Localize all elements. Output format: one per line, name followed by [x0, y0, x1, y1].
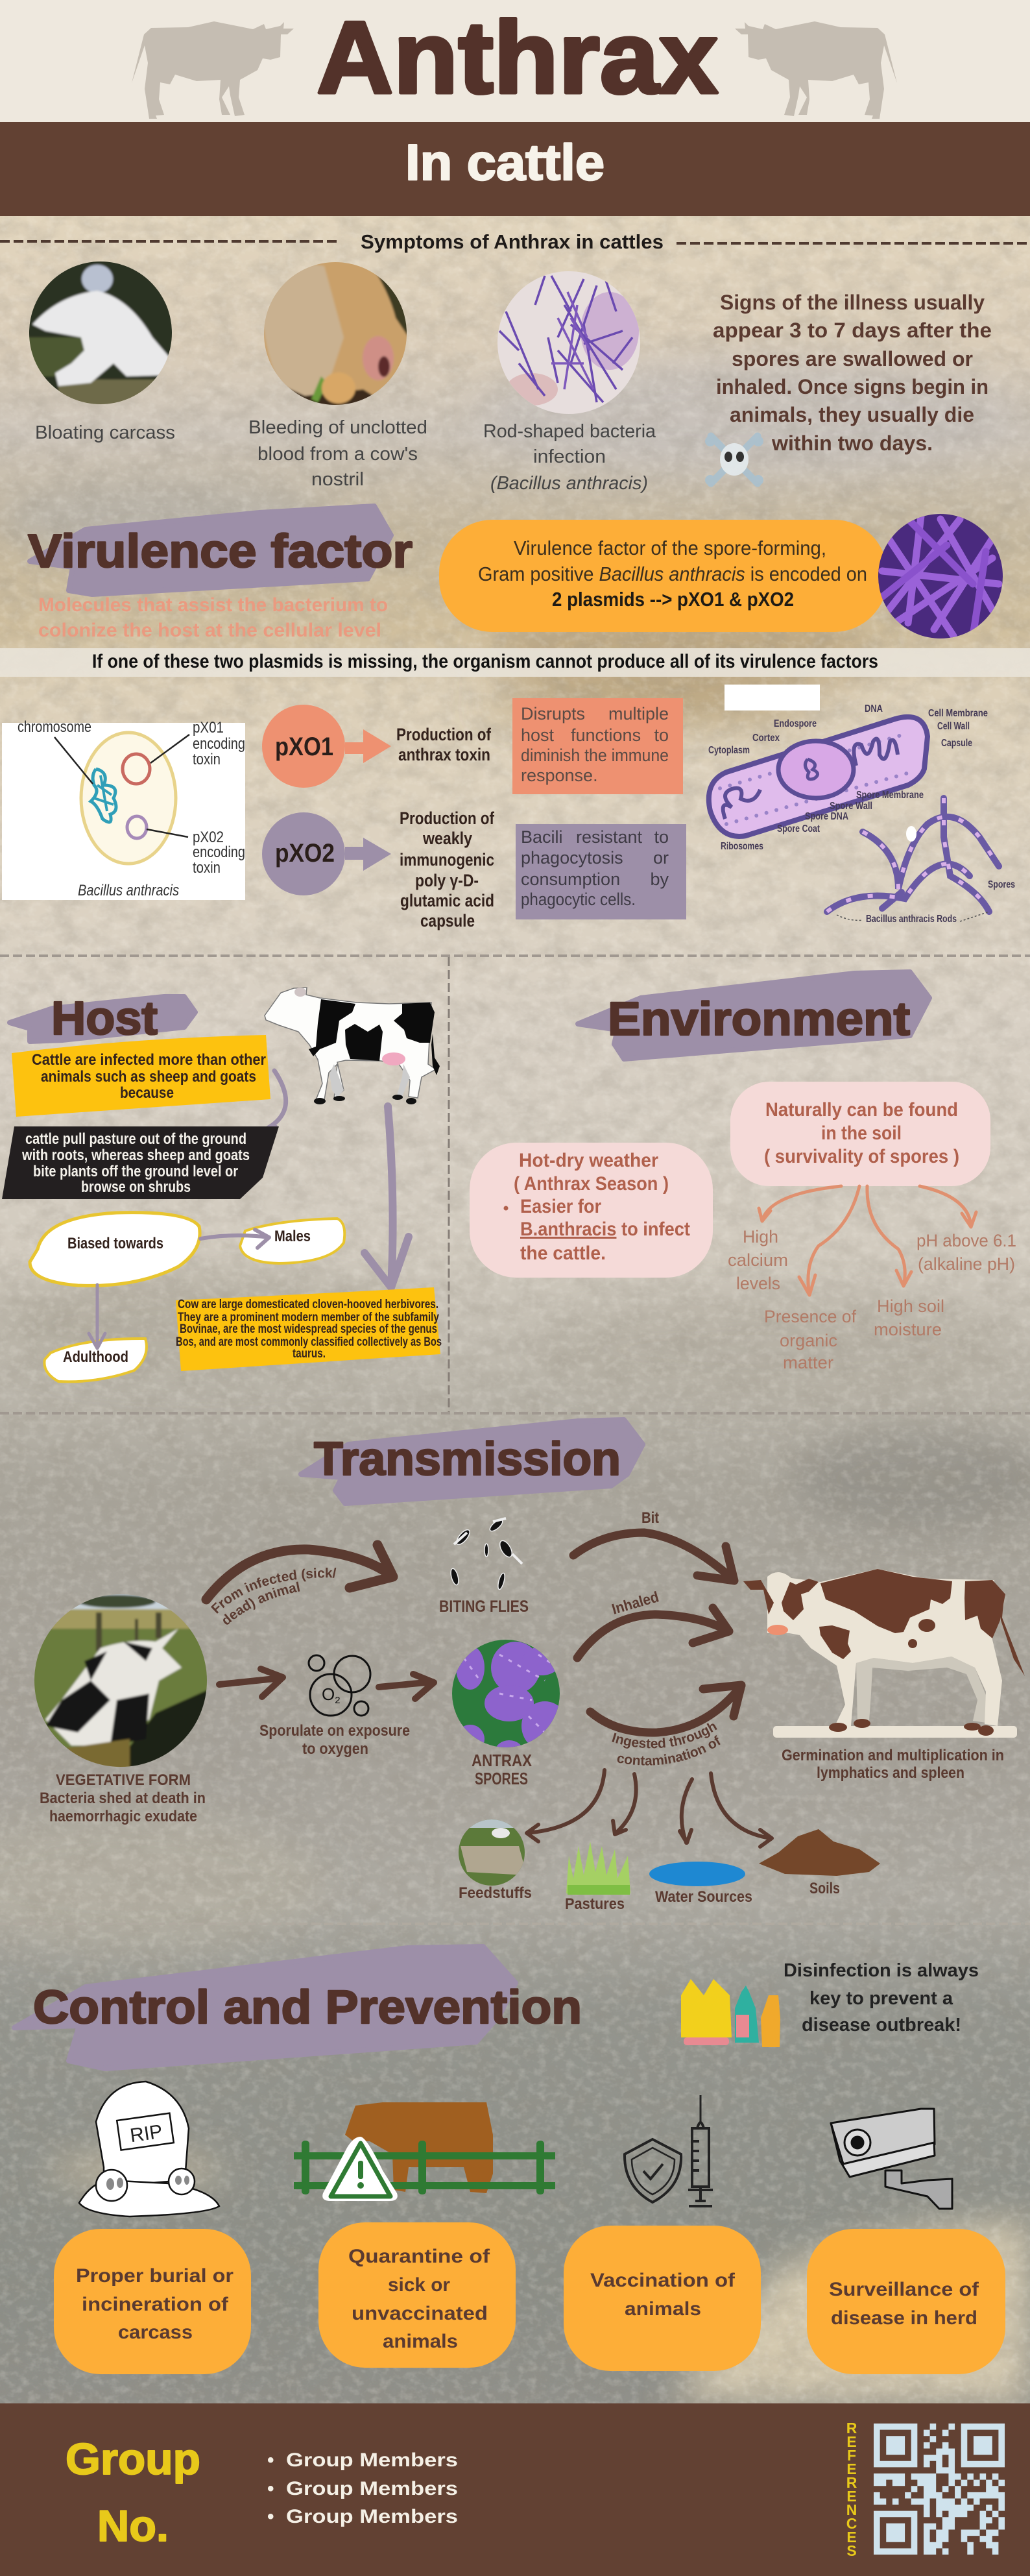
panel: soil: Naturally can be found	[765, 1099, 958, 1121]
references label: N	[846, 2501, 857, 2518]
group members list: •	[267, 2506, 274, 2527]
section: transmission	[32, 1420, 1025, 1913]
label: soils: Soils	[809, 1880, 840, 1897]
label: antrax spores: ANTRAX	[472, 1751, 533, 1770]
diagram: bacillus rods	[827, 798, 1015, 925]
diagram: bacterium anatomy: Spore Membrane	[856, 790, 924, 801]
pXO1 box: functions	[571, 725, 641, 745]
callout text	[32, 1051, 266, 1102]
caption: bacteria: (Bacillus anthracis)	[490, 473, 648, 494]
icon: tombstone	[79, 2082, 219, 2217]
pXO2 box: by	[650, 869, 669, 889]
pXO1 node	[262, 705, 345, 788]
curved label: from infected: dead) animal	[223, 1582, 300, 1625]
callout text	[478, 537, 867, 611]
pXO1 box: response.	[521, 766, 598, 785]
arrow: oxygen to spores	[379, 1674, 434, 1699]
diagram: Bacillus anthracis plasmids: toxin	[193, 859, 221, 877]
icon: cow silhouette right	[735, 21, 897, 119]
diagram: bacterium anatomy: Ribosomes	[721, 841, 763, 852]
arrow: cow to description	[365, 1106, 409, 1287]
references label: S	[846, 2542, 857, 2559]
label: organic matter: Presence of	[764, 1307, 856, 1326]
icon: water	[649, 1862, 745, 1886]
icon: quarantine cow and fence	[294, 2102, 555, 2201]
diagram: bacterium anatomy: Cytoplasm	[708, 745, 750, 756]
label: pH	[916, 1231, 1016, 1274]
label: water sources: Water Sources	[655, 1888, 752, 1906]
pXO2 production text: immunogenic	[400, 850, 494, 869]
icon: oxygen bubbles: O	[322, 1684, 335, 1704]
photo: feedstuffs	[457, 1819, 529, 1887]
section: symptoms	[0, 230, 1030, 494]
label: sporulate	[259, 1722, 410, 1758]
subtext: Molecules that assist the bacterium to	[38, 594, 388, 616]
diagram: bacterium anatomy: Capsule	[941, 738, 972, 749]
label: pastures: Pastures	[565, 1895, 625, 1913]
card: vaccination: animals	[625, 2298, 701, 2320]
pXO2 box: or	[653, 848, 669, 868]
callout text: because	[120, 1084, 174, 1102]
group members list: •	[267, 2449, 274, 2471]
panel: hot-dry weather: B.anthracis to infect	[520, 1219, 690, 1240]
callout text: Cattle are infected more than other	[32, 1051, 266, 1069]
group members list: •	[267, 2478, 274, 2499]
arrow: bit	[573, 1533, 734, 1581]
signs text block: within two days.	[771, 431, 933, 455]
description text: Bos, and are most commonly classified collectively as Bos	[176, 1335, 442, 1349]
pXO2 box	[516, 824, 686, 919]
white patch	[725, 685, 820, 711]
arrow: pXO1	[345, 729, 391, 763]
description text: Bovinae, are the most widespread species of the genus	[180, 1322, 437, 1336]
label: antrax spores	[472, 1751, 533, 1788]
pXO1 production text	[396, 725, 492, 764]
card: burial: carcass	[118, 2322, 193, 2343]
disinfection text: key to prevent a	[809, 1988, 953, 2009]
banner text: If one of these two plasmids is missing, the organism cannot produce all of its virulence factors	[92, 651, 878, 672]
arrow: to adulthood	[89, 1285, 105, 1348]
label: sporulate: Sporulate on exposure	[259, 1722, 410, 1740]
label: inhaled: Inhaled	[610, 1588, 661, 1618]
references label: C	[846, 2515, 857, 2532]
heading: Host	[51, 993, 158, 1045]
pXO1 production text: anthrax toxin	[398, 745, 490, 764]
icon: oxygen bubbles: 2	[335, 1695, 341, 1706]
arrow: bacteria to oxygen	[219, 1669, 283, 1697]
brush stroke	[30, 506, 391, 594]
diagram: Bacillus anthracis plasmids: encoding	[193, 844, 245, 861]
yellow callout	[12, 1035, 270, 1117]
pXO2 production text: weakly	[422, 829, 472, 848]
arrow: ingested	[590, 1685, 741, 1732]
pXO1 box: to	[654, 725, 669, 745]
diagram: Bacillus anthracis plasmids: chromosome	[18, 718, 91, 736]
references label: E	[846, 2433, 857, 2450]
icon: oxygen bubbles	[309, 1655, 370, 1716]
callout text: Virulence factor of the spore-forming,	[514, 537, 826, 559]
icon: tombstone: RIP	[128, 2121, 164, 2146]
blob: biased towards	[30, 1213, 200, 1285]
QR code	[874, 2424, 1005, 2555]
symptoms heading: Symptoms of Anthrax in cattles	[361, 230, 664, 253]
photo: bleeding nostril	[264, 262, 407, 405]
diagram: Bacillus anthracis plasmids	[2, 718, 245, 900]
caption: bacteria	[483, 421, 656, 494]
diagram: Bacillus anthracis plasmids: toxin	[193, 751, 221, 768]
label: vegetative form	[40, 1771, 206, 1825]
black callout text: with roots, whereas sheep and goats	[21, 1147, 250, 1164]
plasmid warning banner	[0, 648, 1030, 677]
signs text block: appear 3 to 7 days after the	[713, 319, 992, 342]
label: biting flies: BITING FLIES	[439, 1598, 529, 1616]
references label: E	[846, 2529, 857, 2546]
callout text: 2 plasmids --> pXO1 & pXO2	[552, 588, 794, 611]
disinfection text: Disinfection is always	[784, 1960, 979, 1981]
label: feedstuffs: Feedstuffs	[459, 1884, 532, 1902]
diagram: bacterium anatomy: Spore DNA	[805, 811, 848, 822]
curved label: ingested	[610, 1719, 724, 1769]
label: soil moisture	[874, 1296, 944, 1339]
references label	[846, 2420, 857, 2559]
references label: E	[846, 2461, 857, 2477]
diagram: bacterium anatomy: Cell Wall	[937, 721, 970, 732]
callout text: Gram positive Bacillus anthracis is encoded on	[478, 563, 867, 585]
pXO2 production text: poly γ-D-	[415, 871, 479, 890]
pXO2 box: to	[654, 827, 669, 847]
label: germination: Germination and multiplication in	[782, 1747, 1004, 1764]
panel: hot-dry weather: ( Anthrax Season )	[514, 1173, 669, 1195]
group number: Group	[66, 2435, 200, 2484]
diagram: Bacillus anthracis plasmids: encoding	[193, 735, 245, 753]
icon: brown and white cow	[743, 1569, 1025, 1738]
pXO1 box: host	[521, 725, 555, 745]
label: high calcium: calcium	[728, 1250, 788, 1270]
subtext	[38, 594, 388, 641]
label: antrax spores: SPORES	[475, 1769, 528, 1788]
yellow description box	[176, 1287, 440, 1371]
card: quarantine: sick or	[388, 2274, 450, 2296]
diagram: Bacillus anthracis plasmids: Bacillus anthracis	[78, 882, 179, 899]
group members list: Group Members	[286, 2449, 458, 2471]
label: pH: pH above 6.1	[916, 1231, 1016, 1250]
card: burial: Proper burial or	[76, 2265, 234, 2287]
pXO2 production text	[400, 808, 495, 930]
section: control and prevention	[14, 1947, 1005, 2374]
subtitle band	[0, 122, 1030, 216]
caption: bacteria: Rod-shaped bacteria	[483, 421, 656, 442]
label: high calcium	[728, 1227, 788, 1293]
card: quarantine: animals	[383, 2331, 458, 2352]
diagram: bacillus rods: Spores	[988, 879, 1015, 890]
caption: bleeding	[248, 417, 427, 490]
arrow: from infected animal	[206, 1545, 393, 1599]
diagram: Bacillus anthracis plasmids: pX02	[193, 829, 224, 846]
arrows: sources	[527, 1770, 772, 1847]
black callout	[2, 1126, 279, 1199]
pXO1 box: Disrupts	[521, 704, 585, 723]
icon: pastures	[566, 1841, 630, 1895]
signs text block: animals, they usually die	[730, 403, 974, 426]
label: vegetative form: Bacteria shed at death in	[40, 1790, 206, 1807]
card: quarantine: unvaccinated	[352, 2303, 488, 2324]
pXO2 node: pXO2	[275, 839, 335, 868]
section: environment	[470, 972, 1016, 1372]
card: quarantine: Quarantine of	[348, 2246, 490, 2267]
label: germination: lymphatics and spleen	[817, 1764, 964, 1782]
black callout text	[21, 1130, 250, 1196]
description text: They are a prominent modern member of the subfamily	[178, 1311, 439, 1324]
signs text block: inhaled. Once signs begin in	[716, 375, 988, 398]
curved label: from infected: From infected (sick/	[211, 1568, 336, 1614]
footer	[0, 2403, 1030, 2576]
references label: R	[846, 2420, 857, 2436]
caption: bleeding: Bleeding of unclotted	[248, 417, 427, 438]
label: organic matter: matter	[783, 1353, 833, 1372]
curved label: ingested: Ingested through	[612, 1723, 717, 1749]
references label: E	[846, 2488, 857, 2505]
diagram: bacterium anatomy: Spore Wall	[830, 801, 872, 812]
card: burial: incineration of	[82, 2294, 229, 2315]
pXO2 box: consumption	[521, 869, 620, 889]
disinfection text: disease outbreak!	[802, 2015, 961, 2035]
blob: males: Males	[274, 1228, 311, 1245]
diagram: bacterium anatomy: DNA	[865, 703, 883, 714]
description text: Cow are large domesticated cloven-hooved herbivores.	[178, 1298, 438, 1311]
pXO1 node: pXO1	[275, 733, 333, 761]
pXO2 production text: Production of	[400, 808, 495, 828]
pXO2 box: phagocytosis	[521, 848, 623, 868]
curved label: ingested: contamination of	[617, 1735, 721, 1766]
label: organic matter	[764, 1307, 856, 1372]
card: quarantine	[318, 2222, 516, 2368]
references label: F	[847, 2447, 856, 2464]
subtitle: In cattle	[405, 134, 605, 191]
heading: Transmission	[314, 1433, 621, 1485]
black callout text: cattle pull pasture out of the ground	[25, 1130, 246, 1148]
brush stroke	[14, 1947, 516, 2069]
card: vaccination	[564, 2226, 761, 2371]
pXO2 production text: capsule	[420, 911, 475, 930]
label: vegetative form: haemorrhagic exudate	[49, 1808, 197, 1825]
black callout text: browse on shrubs	[81, 1178, 191, 1196]
label: soil moisture: High soil	[877, 1296, 944, 1316]
arrow: to males	[200, 1230, 269, 1248]
label: germination	[782, 1747, 1004, 1782]
caption: bloating carcass: Bloating carcass	[35, 422, 175, 443]
photo: anthrax spores	[451, 1638, 568, 1764]
brush stroke	[301, 1420, 643, 1503]
diagram: bacterium anatomy: Spore Coat	[777, 823, 820, 834]
disinfection text	[784, 1960, 979, 2035]
title: Anthrax	[317, 1, 718, 115]
blob: males	[240, 1219, 344, 1263]
arrow: pXO2	[345, 838, 391, 871]
group members list	[267, 2449, 458, 2527]
arrow: inhaled	[577, 1608, 729, 1658]
section: host	[2, 988, 442, 1381]
heading: Virulence factor	[28, 526, 413, 577]
panel: soil: in the soil	[821, 1123, 902, 1144]
pXO1 box	[512, 698, 683, 794]
pXO1 production text: Production of	[396, 725, 492, 744]
label: pH: (alkaline pH)	[918, 1254, 1015, 1274]
caption: bleeding: blood from a cow's	[258, 444, 418, 465]
diagram: bacterium anatomy	[708, 703, 988, 852]
pXO2 box: phagocytic cells.	[521, 890, 636, 909]
pXO2 box: Bacili	[521, 827, 563, 847]
label: vegetative form: VEGETATIVE FORM	[56, 1771, 191, 1789]
pXO2 node	[262, 812, 345, 895]
photo: dead cow	[32, 1593, 214, 1771]
icon: cow silhouette left	[132, 21, 294, 119]
pXO2 box: resistant	[576, 827, 643, 847]
photo: purple bacilli	[876, 513, 1005, 642]
description text	[176, 1298, 442, 1361]
heading: Control and Prevention	[33, 1982, 582, 2034]
references label: R	[846, 2474, 857, 2491]
icon: surveillance camera	[831, 2109, 952, 2209]
blob: adulthood	[44, 1339, 147, 1381]
panel: hot-dry weather	[470, 1143, 713, 1278]
black callout text: bite plants off the ground level or	[33, 1163, 238, 1180]
diagram: bacterium anatomy: Endospore	[774, 718, 817, 729]
arrow: because	[254, 1071, 286, 1146]
signs text block	[713, 291, 992, 455]
icon: skull and crossbones	[705, 436, 763, 485]
caption: bacteria: infection	[533, 446, 606, 467]
panel: hot-dry weather: Hot-dry weather	[519, 1150, 658, 1171]
orange callout	[439, 520, 887, 632]
card: surveillance	[807, 2229, 1005, 2374]
label: organic matter: organic	[780, 1331, 837, 1350]
diagram: bacterium anatomy: Cell Membrane	[928, 708, 988, 719]
group members list: Group Members	[286, 2478, 458, 2499]
group number	[66, 2435, 200, 2551]
panel: soil: ( survivality of spores )	[764, 1146, 959, 1167]
panel: soil	[730, 1082, 990, 1186]
icon: holstein cow	[265, 988, 440, 1104]
card: vaccination: Vaccination of	[590, 2270, 736, 2291]
description text: taurus.	[293, 1347, 326, 1361]
brush stroke	[578, 972, 929, 1059]
group number: No.	[97, 2501, 169, 2551]
label: bit: Bit	[641, 1509, 659, 1527]
diagram: bacterium anatomy: Cortex	[752, 733, 780, 744]
label: soil moisture: moisture	[874, 1320, 942, 1339]
signs text block: Signs of the illness usually	[720, 291, 985, 314]
signs text block: spores are swallowed or	[732, 347, 973, 371]
diagram: bacillus rods: Bacillus anthracis Rods	[866, 914, 957, 925]
icon: shield and syringe	[625, 2095, 713, 2206]
panel: hot-dry weather: Easier for	[520, 1196, 601, 1217]
label: high calcium: levels	[736, 1274, 780, 1293]
callout text: animals such as sheep and goats	[41, 1068, 256, 1086]
card: burial	[54, 2229, 251, 2374]
icon: gloves and bottles	[681, 1979, 780, 2047]
label: high calcium: High	[743, 1227, 778, 1246]
brush stroke	[10, 997, 195, 1041]
card: surveillance: disease in herd	[831, 2307, 977, 2329]
pXO1 box: diminish the immune	[521, 746, 669, 765]
pXO2 production text: glutamic acid	[400, 891, 494, 910]
section: virulence factor	[28, 506, 1005, 642]
pXO1 box: multiple	[608, 704, 669, 723]
header band	[0, 0, 1030, 122]
panel: hot-dry weather: the cattle.	[520, 1243, 606, 1264]
arrows: soil factors	[759, 1186, 976, 1295]
diagram: Bacillus anthracis plasmids: pX01	[193, 719, 224, 736]
card: surveillance: Surveillance of	[829, 2279, 979, 2300]
group members list: Group Members	[286, 2506, 458, 2527]
caption: bleeding: nostril	[311, 469, 364, 490]
icon: biting flies	[449, 1518, 522, 1590]
photo: bloating carcass	[26, 260, 175, 409]
icon: soil pile	[759, 1829, 880, 1876]
blob: adulthood: Adulthood	[63, 1348, 128, 1366]
photo: rod-shaped bacteria	[497, 271, 640, 414]
subtext: colonize the host at the cellular level	[38, 620, 381, 641]
blob: biased towards: Biased towards	[67, 1235, 163, 1252]
label: sporulate: to oxygen	[302, 1740, 368, 1758]
heading: Environment	[608, 993, 910, 1045]
